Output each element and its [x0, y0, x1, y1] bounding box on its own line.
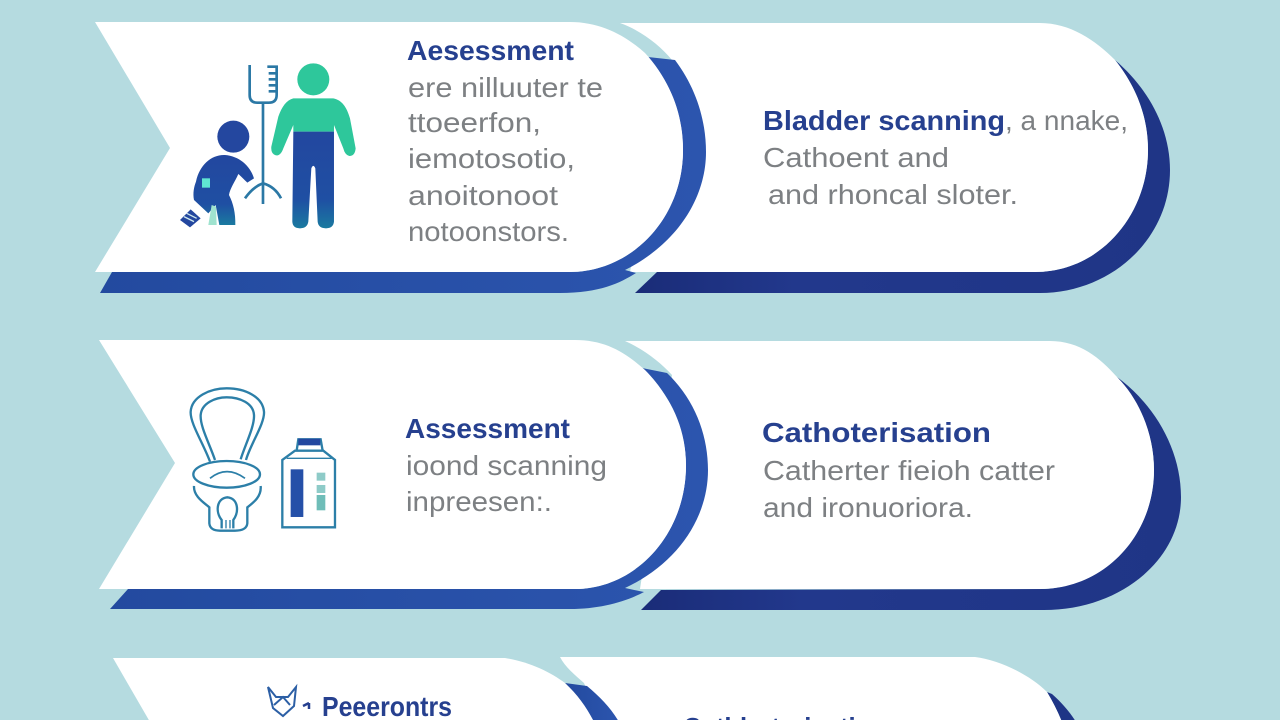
- text: second assessment description: [406, 450, 607, 517]
- text: assessment description: [408, 72, 603, 247]
- heading: assessment: Aesessment: [407, 35, 574, 66]
- text: bladder scanning description: and rhoncal sloter.: [768, 179, 1018, 210]
- text: assessment description: notoonstors.: [408, 216, 569, 247]
- heading: catheterisation: Cathoterisation: [762, 417, 991, 448]
- text: second assessment description: inpreesen:.: [406, 486, 552, 517]
- icon: patient, child and drip stand: [180, 63, 356, 228]
- text: assessment description: ttoeerfon,: [408, 107, 541, 138]
- heading: assessment second: Assessment: [405, 413, 570, 444]
- panel: bladder scanning: [620, 23, 1170, 293]
- text: catheterisation description: Catherter fieioh catter: [763, 455, 1055, 486]
- panel: lower right cropped: [560, 657, 1076, 720]
- text: assessment description: anoitonoot: [408, 180, 558, 211]
- text: assessment description: ere nilluuter te: [408, 72, 603, 103]
- icon: cropped animal head: [268, 687, 309, 716]
- text: second assessment description: ioond scanning: [406, 450, 607, 481]
- text: assessment description: iemotosotio,: [408, 143, 575, 174]
- text: catheterisation description: [763, 455, 1055, 523]
- text: catheterisation description: and ironuoriora.: [763, 492, 973, 523]
- panel: assessment with toilet: [99, 340, 708, 609]
- icon: toilet seat and container: [191, 388, 335, 531]
- panel: catheterisation: [625, 341, 1181, 610]
- text: bladder scanning description: , a nnake,: [1005, 105, 1128, 136]
- panel: assessment with patient: [95, 22, 706, 293]
- heading: bladder scanning: Bladder scanning: [763, 105, 1005, 136]
- text: bladder scanning description: Cathoent and: [763, 142, 949, 173]
- panel: lower left cropped: [113, 658, 619, 720]
- text: bladder scanning description: [763, 105, 1128, 210]
